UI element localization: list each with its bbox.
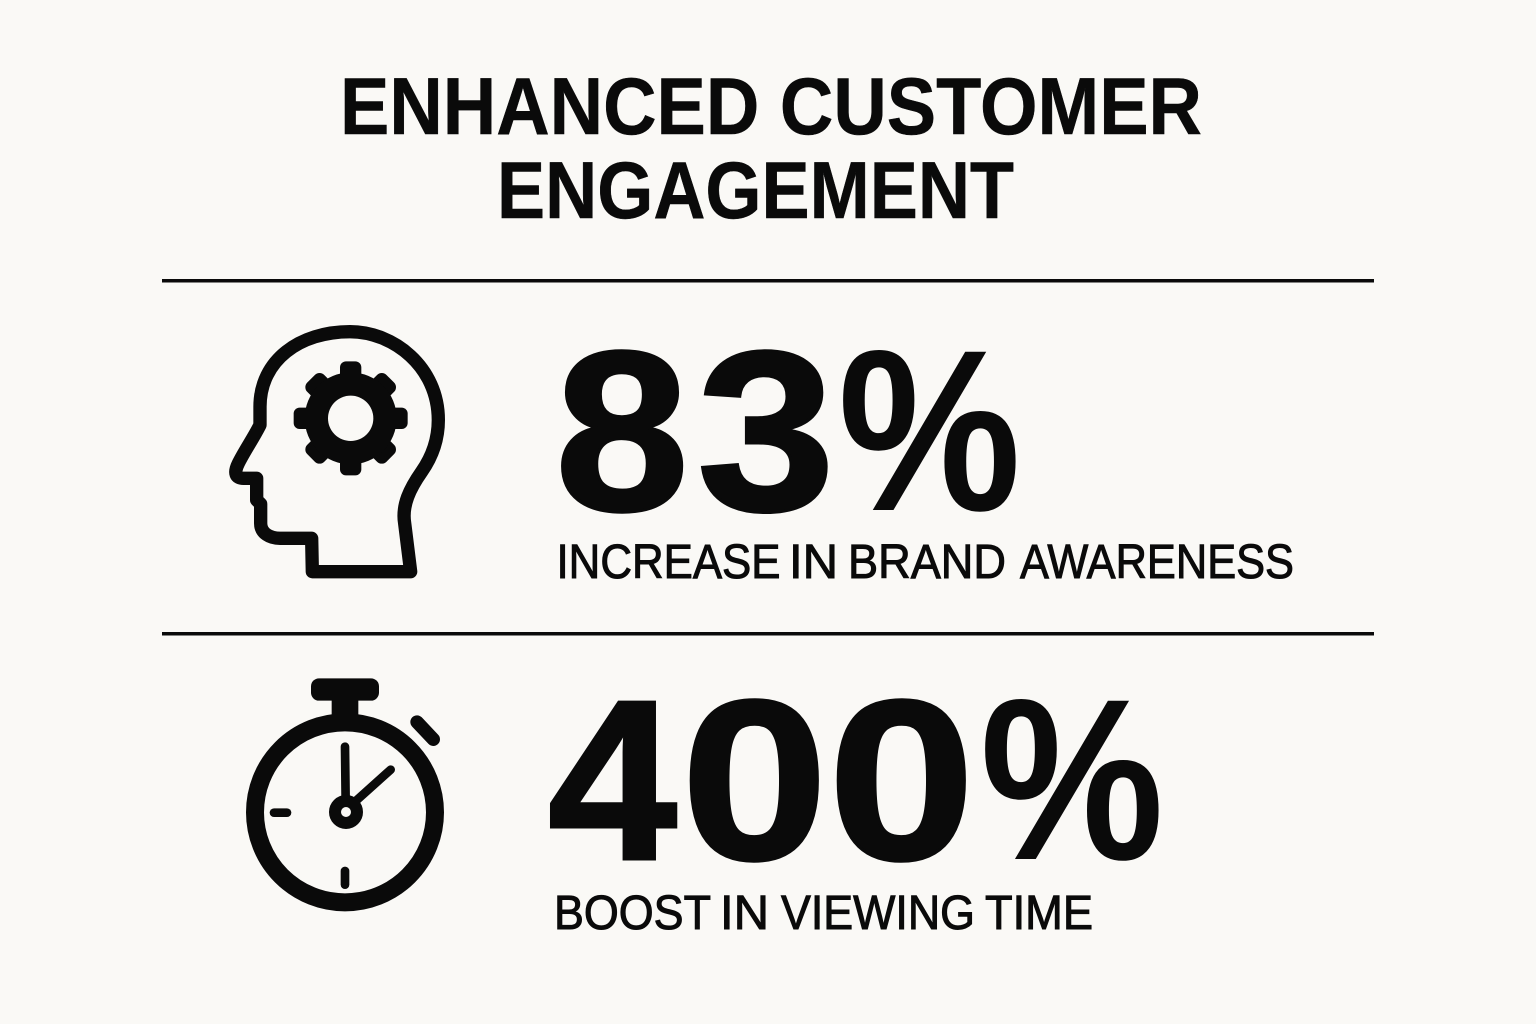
- label: increase in brand awareness: BRAND: [848, 536, 1006, 589]
- ticks: [274, 813, 345, 885]
- label: increase in brand awareness: [556, 536, 1294, 589]
- panel: brand awareness stat: [236, 302, 1294, 589]
- panel: viewing time stat: [255, 651, 1164, 940]
- title: ENGAGEMENT: [497, 146, 1014, 236]
- label: boost in viewing time: [554, 887, 1093, 940]
- stem: [332, 698, 358, 722]
- stat: 83%: %: [838, 302, 1021, 559]
- stat: 83%: [555, 302, 1021, 559]
- stat: 400%: [548, 651, 1164, 908]
- stat: 83%: 3: [697, 305, 835, 559]
- clock hands: [345, 747, 391, 802]
- icon: head with gear: [236, 332, 438, 572]
- stat: 400%: %: [980, 651, 1164, 908]
- label: increase in brand awareness: IN: [789, 536, 838, 589]
- label: increase in brand awareness: AWARENESS: [1020, 536, 1294, 589]
- stat: 83%: 8: [555, 305, 689, 559]
- label: boost in viewing time: VIEWING: [781, 887, 975, 940]
- stat: 400%: 0: [681, 654, 828, 908]
- side button: [417, 722, 433, 739]
- gear: [294, 361, 408, 475]
- label: boost in viewing time: BOOST: [554, 887, 711, 940]
- title: ENHANCED CUSTOMER: [340, 62, 1202, 152]
- title: [340, 62, 1202, 236]
- label: increase in brand awareness: INCREASE: [556, 536, 780, 589]
- stat: 400%: 0: [828, 654, 975, 908]
- dial ring: [255, 722, 435, 902]
- hub: [335, 801, 357, 823]
- label: boost in viewing time: TIME: [985, 887, 1093, 940]
- label: boost in viewing time: IN: [720, 887, 769, 940]
- head outline: [236, 332, 438, 572]
- icon: stopwatch: [255, 678, 435, 902]
- crown: [311, 678, 379, 701]
- stat: 400%: 4: [548, 654, 677, 908]
